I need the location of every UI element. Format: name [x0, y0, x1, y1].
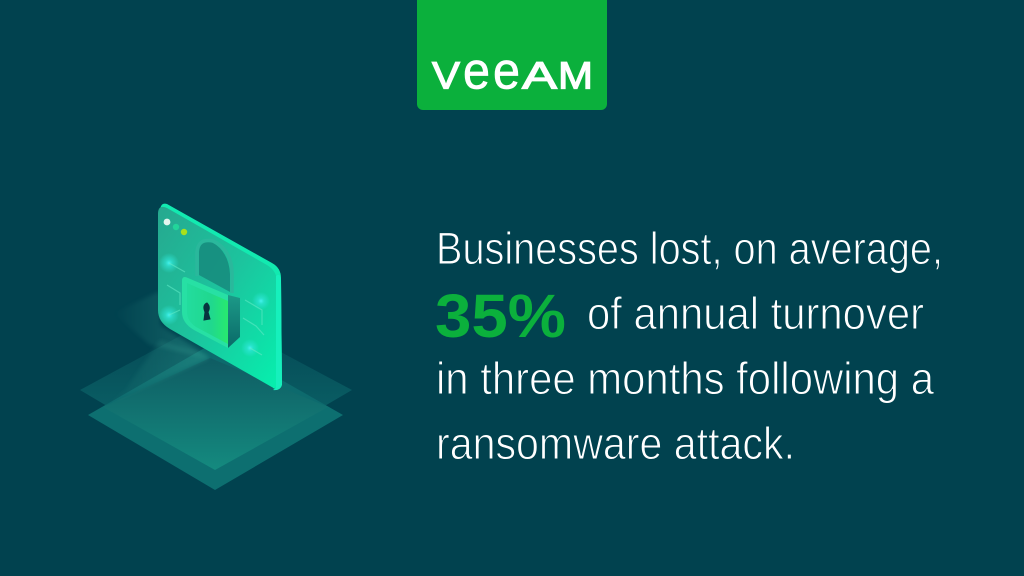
circuit glows — [159, 253, 270, 357]
line 4: ransomware attack. — [436, 418, 795, 469]
lock side — [228, 295, 240, 348]
upper floor plane — [80, 317, 352, 470]
lock shackle — [199, 241, 230, 292]
right edge — [273, 275, 282, 390]
lower floor plane — [88, 342, 343, 490]
logo wordmark: V — [432, 56, 461, 98]
inner lit floor — [103, 358, 328, 470]
line 2: of annual turnover — [587, 288, 924, 339]
screen rim — [160, 204, 282, 389]
highlighted figure 35%: 35% — [435, 282, 566, 350]
keyhole — [204, 303, 210, 320]
logo wordmark: A — [522, 56, 558, 98]
statistic text — [435, 223, 943, 469]
line 1: Businesses lost, on average, — [436, 223, 943, 274]
logo wordmark: e — [493, 42, 520, 100]
logo wordmark: e — [463, 42, 490, 100]
window buttons — [164, 219, 187, 235]
logo wordmark: M — [558, 56, 593, 98]
lock body inner — [187, 283, 228, 344]
screen face — [158, 207, 277, 390]
line 3: in three months following a — [436, 353, 935, 404]
light beam upper — [113, 291, 210, 358]
logo badge — [417, 0, 607, 110]
lock body — [182, 277, 228, 348]
illustration: padlock on floating screen — [80, 204, 352, 490]
light beam lower — [103, 340, 210, 407]
